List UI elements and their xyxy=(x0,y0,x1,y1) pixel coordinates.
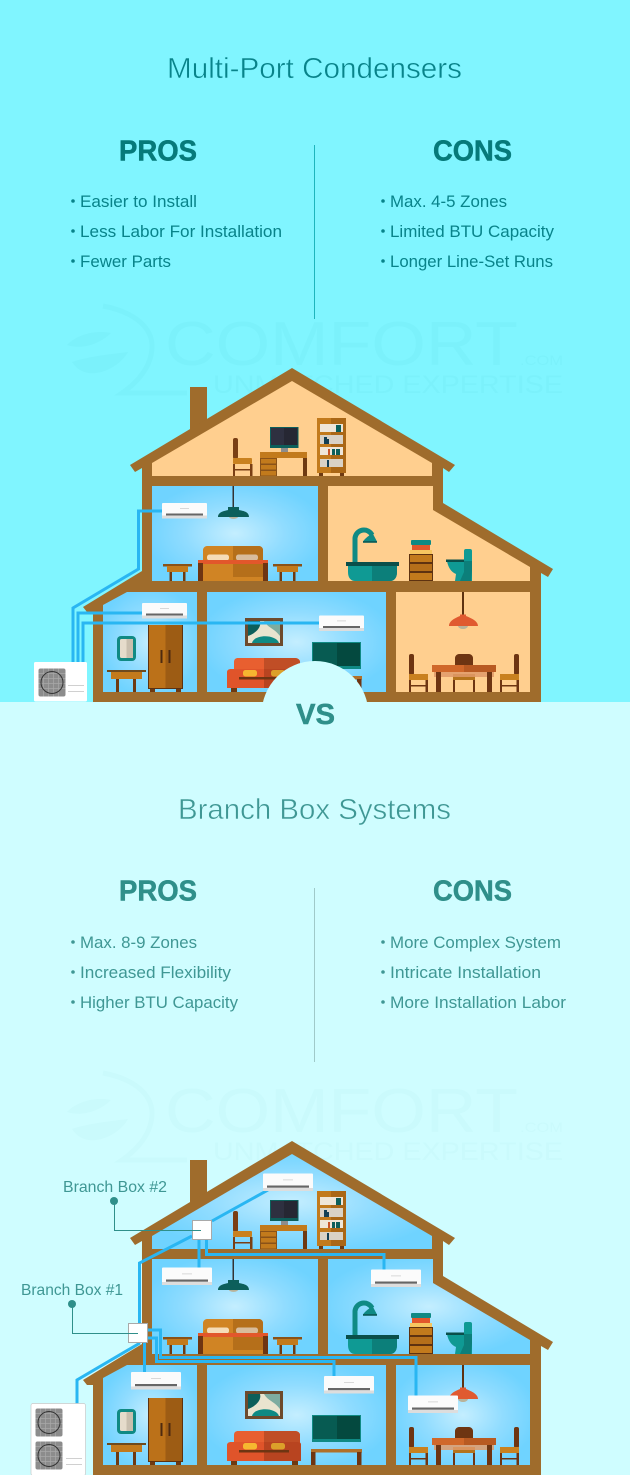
furniture: sofa xyxy=(227,1431,301,1465)
furniture: bookcase xyxy=(317,418,346,476)
house: multi-port xyxy=(34,368,553,702)
refrigerant lines xyxy=(77,1190,416,1404)
indoor unit: living room xyxy=(319,616,364,631)
branch box 2 xyxy=(192,1220,212,1240)
house: branch box xyxy=(21,1141,553,1475)
furniture: side table left xyxy=(163,564,192,581)
furniture: bench xyxy=(311,1449,362,1465)
furniture: mirror xyxy=(117,636,136,661)
furniture: dining lamp xyxy=(449,1365,478,1402)
watermark: bottom: .COM xyxy=(520,1119,563,1135)
indoor unit: bedroom xyxy=(162,1268,212,1285)
furniture: low table xyxy=(107,670,146,692)
furniture: toilet xyxy=(446,549,472,581)
watermark: bottom xyxy=(67,1073,563,1166)
heading: cons top: CONS xyxy=(433,136,512,168)
list: pros top: Easier to Install xyxy=(80,193,197,211)
list: pros bottom: Max. 8-9 Zones xyxy=(80,934,197,952)
watermark: bottom: COMFORT xyxy=(165,1077,518,1146)
furniture: attic chair xyxy=(233,1211,252,1249)
vs badge xyxy=(262,661,368,768)
watermark: top: COMFORT xyxy=(165,310,518,379)
list: cons top xyxy=(381,193,555,271)
background: bottom section xyxy=(0,702,630,1475)
outdoor condenser dual fan xyxy=(31,1404,86,1475)
furniture: wardrobe xyxy=(148,625,183,692)
indoor unit: bathroom xyxy=(371,1270,421,1287)
furniture: bookcase xyxy=(317,1191,346,1249)
watermark: top xyxy=(67,306,563,399)
furniture: monitor xyxy=(270,427,298,452)
list: cons top: Longer Line-Set Runs xyxy=(390,253,553,271)
outdoor condenser xyxy=(34,662,87,702)
furniture: dining lamp xyxy=(449,592,478,629)
title: Branch Box Systems: Branch Box Systems xyxy=(178,794,451,826)
heading: pros top: PROS xyxy=(119,136,197,168)
refrigerant lines xyxy=(73,511,320,663)
label: Branch Box #1: Branch Box #1 xyxy=(21,1282,123,1299)
list: cons bottom xyxy=(381,934,567,1012)
furniture: monitor xyxy=(270,1200,298,1225)
furniture: attic chair xyxy=(233,438,252,476)
furniture: side table left xyxy=(163,1337,192,1354)
furniture: side table right xyxy=(273,1337,302,1354)
list: cons bottom: More Complex System xyxy=(390,934,561,952)
furniture: desk xyxy=(260,452,307,476)
furniture: toilet xyxy=(446,1322,472,1354)
list: pros bottom: Increased Flexibility xyxy=(80,964,232,982)
indoor unit: lower left xyxy=(131,1372,181,1390)
list: cons bottom: More Installation Labor xyxy=(390,994,567,1012)
indoor unit: dining room xyxy=(408,1396,458,1413)
indoor unit: bedroom xyxy=(162,503,207,518)
indoor unit: lower left xyxy=(142,603,187,618)
furniture: desk xyxy=(260,1225,307,1249)
label: Branch Box #2 xyxy=(63,1179,201,1230)
furniture: mirror xyxy=(117,1409,136,1434)
list: pros top: Less Labor For Installation xyxy=(80,223,282,241)
list: pros bottom xyxy=(71,934,239,1012)
furniture: dresser xyxy=(409,1313,433,1354)
furniture: dining set xyxy=(409,1427,519,1465)
watermark: top: UNMATCHED EXPERTISE xyxy=(213,371,563,399)
furniture: wardrobe xyxy=(148,1398,183,1465)
vs badge: VS xyxy=(296,699,335,731)
furniture: bathtub xyxy=(346,1303,399,1354)
furniture: dresser xyxy=(409,540,433,581)
furniture: dining set xyxy=(409,654,519,692)
list: cons bottom: Intricate Installation xyxy=(390,964,541,982)
heading: cons bottom: CONS xyxy=(433,876,512,908)
label: Branch Box #2: Branch Box #2 xyxy=(63,1179,167,1196)
list: cons top: Max. 4-5 Zones xyxy=(390,193,507,211)
watermark: bottom: UNMATCHED EXPERTISE xyxy=(213,1138,563,1166)
furniture: tv xyxy=(312,642,361,669)
indoor unit: attic xyxy=(263,1174,313,1191)
list: pros top: Fewer Parts xyxy=(80,253,171,271)
list: cons top: Limited BTU Capacity xyxy=(390,223,555,241)
furniture: picture xyxy=(245,618,283,646)
watermark: top: .COM xyxy=(520,352,563,368)
furniture: bed xyxy=(198,1319,268,1354)
furniture: tv xyxy=(312,1415,361,1442)
furniture: ceiling lamp xyxy=(218,486,249,519)
furniture: side table right xyxy=(273,564,302,581)
indoor unit: living room xyxy=(324,1376,374,1394)
furniture: bench xyxy=(311,676,362,692)
title: Multi-Port Condensers: Multi-Port Condensers xyxy=(167,53,462,85)
list: pros top xyxy=(71,193,282,271)
furniture: bathtub xyxy=(346,530,399,581)
furniture: ceiling lamp xyxy=(218,1259,249,1292)
furniture: low table xyxy=(107,1443,146,1465)
branch box 1 xyxy=(128,1324,148,1342)
furniture: bed xyxy=(198,546,268,581)
furniture: picture xyxy=(245,1391,283,1419)
furniture: sofa xyxy=(227,658,301,692)
heading: pros bottom: PROS xyxy=(119,876,197,908)
list: pros bottom: Higher BTU Capacity xyxy=(80,994,239,1012)
label: Branch Box #1 xyxy=(21,1282,138,1334)
background: top section xyxy=(0,0,630,702)
